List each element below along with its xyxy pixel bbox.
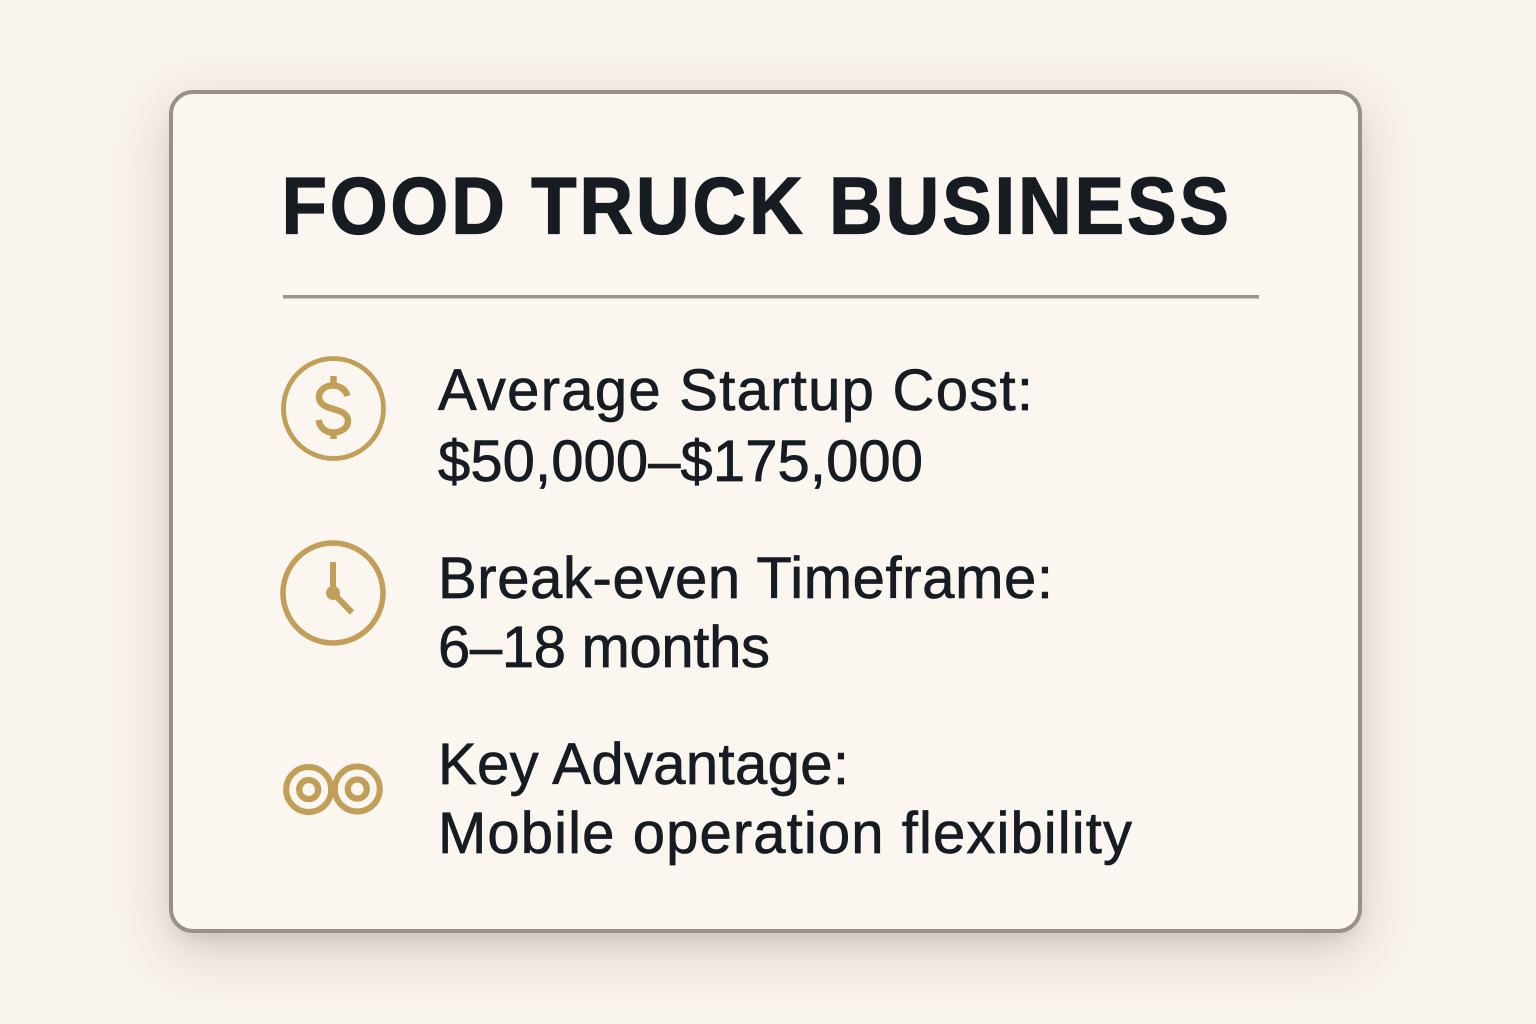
text: key advantage: [438, 732, 1132, 866]
text: break-even: 6–18 months: [438, 615, 770, 680]
text: break-even: [438, 546, 1053, 680]
item: key advantage: [286, 732, 1132, 866]
icon: clock: [283, 543, 383, 643]
text: startup cost: $50,000–$175,000: [438, 429, 923, 494]
text: startup cost: [438, 358, 1033, 494]
panel: card: [171, 92, 1360, 931]
card shadow: [165, 104, 1365, 954]
icon: double rings: [286, 766, 380, 812]
text: break-even: Break-even Timeframe:: [438, 546, 1053, 611]
text: key advantage: Key Advantage:: [438, 732, 849, 797]
text: startup cost: Average Startup Cost:: [438, 358, 1033, 423]
text: key advantage: Mobile operation flexibility: [438, 801, 1132, 866]
icon: dollar sign: [284, 358, 384, 458]
item: average startup cost: [284, 358, 1033, 494]
title: FOOD TRUCK BUSINESS: [282, 162, 1229, 251]
item: break-even timeframe: [283, 543, 1053, 680]
